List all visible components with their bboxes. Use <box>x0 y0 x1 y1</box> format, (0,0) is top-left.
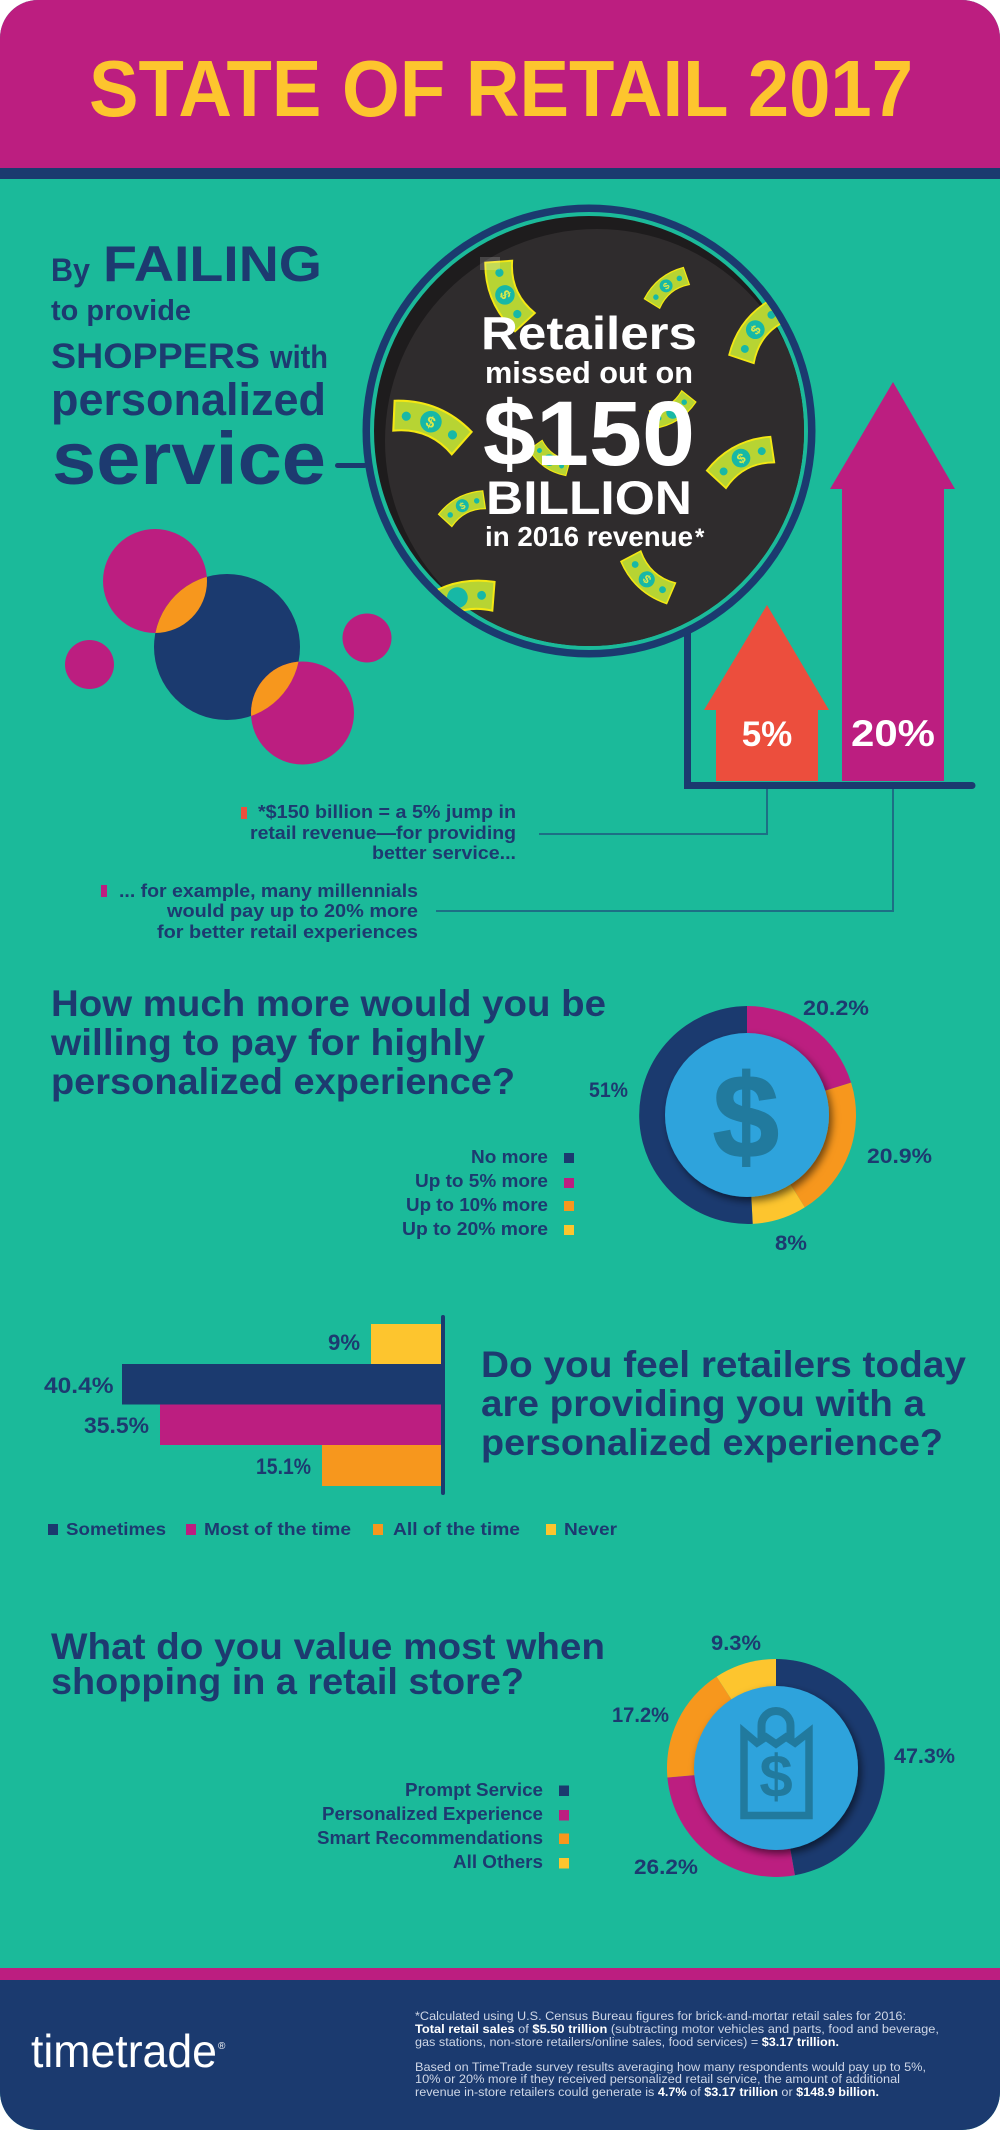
circle headline: in 2016 revenue <box>485 521 693 552</box>
connector to circle <box>335 463 367 468</box>
falling bills: $ <box>458 500 468 513</box>
footer panel <box>0 1980 1000 2130</box>
bar labels: 35.5% <box>84 1413 149 1438</box>
arrow 5%: 5% <box>742 715 792 754</box>
callout: millennials: ... for example, many millennials <box>119 880 418 901</box>
circle headline: Retailers <box>481 307 697 359</box>
footnotes: revenue in-store retailers could generate is 4.7% of $3.17 trillion or $148.9 billion. <box>415 2085 879 2099</box>
legend: bar chart: Most of the time <box>204 1519 351 1539</box>
heading: personalized experience <box>481 1343 966 1463</box>
heading: pay more: How much more would you be <box>51 982 606 1024</box>
footnotes: *Calculated using U.S. Census Bureau figures for brick-and-mortar retail sales for 2016: <box>415 2009 906 2023</box>
legend: bar chart: Sometimes <box>66 1519 166 1539</box>
donut labels: pay more: 20.9% <box>867 1145 932 1168</box>
leader line to 5% <box>539 789 767 834</box>
callout: millennials: for better retail experiences <box>157 921 418 942</box>
intro text block: service <box>52 417 326 500</box>
logo: timetrade: ® <box>218 2041 226 2052</box>
legend: value most: Prompt Service <box>405 1779 543 1800</box>
donut labels: value most <box>612 1632 955 1879</box>
footnotes: Based on TimeTrade survey results averaging how many respondents would pay up to 5%, <box>415 2060 926 2074</box>
arrow 5% <box>704 605 829 781</box>
heading: value most <box>51 1625 605 1702</box>
logo: timetrade: timetrade <box>31 2025 217 2077</box>
donut labels: value most: 26.2% <box>634 1856 698 1879</box>
footnotes <box>415 2009 939 2099</box>
bar labels: 40.4% <box>44 1373 114 1398</box>
header band <box>0 0 1000 168</box>
circle headline <box>481 307 705 552</box>
donut chart: pay more <box>639 1006 856 1224</box>
legend: pay more: Up to 5% more <box>415 1170 548 1191</box>
callout: millennials: would pay up to 20% more <box>166 900 418 921</box>
arrow 20%: 20% <box>851 713 935 754</box>
falling bills: $ <box>640 571 654 586</box>
bar chart <box>44 1315 445 1495</box>
axis for arrows <box>688 630 972 786</box>
legend: pay more: Up to 20% more <box>402 1218 548 1239</box>
donut chart: value most <box>667 1659 885 1877</box>
intro text block: to provide <box>51 295 191 327</box>
callout: 5% jump: better service... <box>372 842 516 863</box>
legend: bar chart: All of the time <box>393 1519 520 1539</box>
intro text block: SHOPPERS <box>51 337 260 376</box>
legend: value most: All Others <box>453 1851 543 1872</box>
donut labels: pay more: 20.2% <box>803 997 869 1020</box>
falling bills: $ <box>734 450 748 467</box>
heading: pay more: willing to pay for highly <box>50 1021 485 1063</box>
footnotes: Total retail sales of $5.50 trillion (subtracting motor vehicles and parts, food and beverage, <box>415 2022 939 2036</box>
intro text block <box>51 236 328 500</box>
bar labels: 9% <box>328 1330 360 1355</box>
legend: pay more <box>402 1146 574 1239</box>
falling bills: $ <box>661 280 673 293</box>
falling bills <box>384 252 793 629</box>
heading: value most: What do you value most when <box>51 1625 605 1667</box>
legend: bar chart <box>48 1519 617 1539</box>
donut centre with dollar icon: $ <box>713 1051 779 1183</box>
heading: personalized experience: are providing you with a <box>481 1382 926 1424</box>
legend: value most <box>317 1779 569 1872</box>
bar labels: 15.1% <box>256 1454 311 1479</box>
callout: 5% jump: retail revenue—for providing <box>250 822 516 843</box>
heading: pay more <box>50 982 606 1102</box>
donut labels: value most: 17.2% <box>612 1704 669 1727</box>
donut labels: pay more <box>589 997 932 1255</box>
circle headline: $150 <box>483 383 695 485</box>
legend: value most: Personalized Experience <box>322 1803 543 1824</box>
donut centre with shopping bag icon: $ <box>759 1743 793 1810</box>
donut labels: value most: 47.3% <box>894 1745 955 1768</box>
money circle <box>362 204 816 658</box>
heading: personalized experience: personalized experience? <box>481 1421 943 1463</box>
intro text block: with <box>269 339 328 375</box>
donut centre with shopping bag icon <box>694 1686 858 1850</box>
callout: 5% jump: *$150 billion = a 5% jump in <box>258 801 516 822</box>
footnotes: 10% or 20% more if they received personalized retail service, the amount of additional <box>415 2072 900 2086</box>
heading: personalized experience: Do you feel retailers today <box>481 1343 966 1385</box>
circle headline: BILLION <box>486 471 692 524</box>
footer accent band <box>0 1968 1000 1980</box>
header underline <box>0 168 1000 179</box>
circle headline: missed out on <box>485 355 693 390</box>
legend: value most: Smart Recommendations <box>317 1827 543 1848</box>
donut centre with dollar icon <box>665 1033 829 1197</box>
donut labels: value most: 9.3% <box>711 1632 761 1655</box>
footnotes: gas stations, non-store retailers/online sales, food services) = $3.17 trillion. <box>415 2035 839 2049</box>
bar labels <box>44 1330 360 1479</box>
callout: 5% jump <box>241 801 516 863</box>
callout: millennials <box>101 880 418 942</box>
decorative overlapping circles <box>65 529 392 764</box>
legend: pay more: No more <box>471 1146 548 1167</box>
leader line to 20% <box>436 789 893 911</box>
falling bills: $ <box>423 413 438 433</box>
falling bills: $ <box>747 322 764 338</box>
intro text block: personalized <box>51 374 326 425</box>
arrow 20% <box>830 382 955 781</box>
circle headline: * <box>695 524 705 551</box>
legend: pay more: Up to 10% more <box>406 1194 548 1215</box>
heading: pay more: personalized experience? <box>51 1060 515 1102</box>
intro text block: FAILING <box>103 236 322 292</box>
title: STATE OF RETAIL 2017 <box>89 44 913 133</box>
donut labels: pay more: 8% <box>775 1232 807 1255</box>
heading: value most: shopping in a retail store? <box>51 1660 524 1702</box>
intro text block: By <box>51 252 90 288</box>
falling bills: $ <box>497 288 515 301</box>
legend: bar chart: Never <box>564 1519 617 1539</box>
donut labels: pay more: 51% <box>589 1079 628 1102</box>
